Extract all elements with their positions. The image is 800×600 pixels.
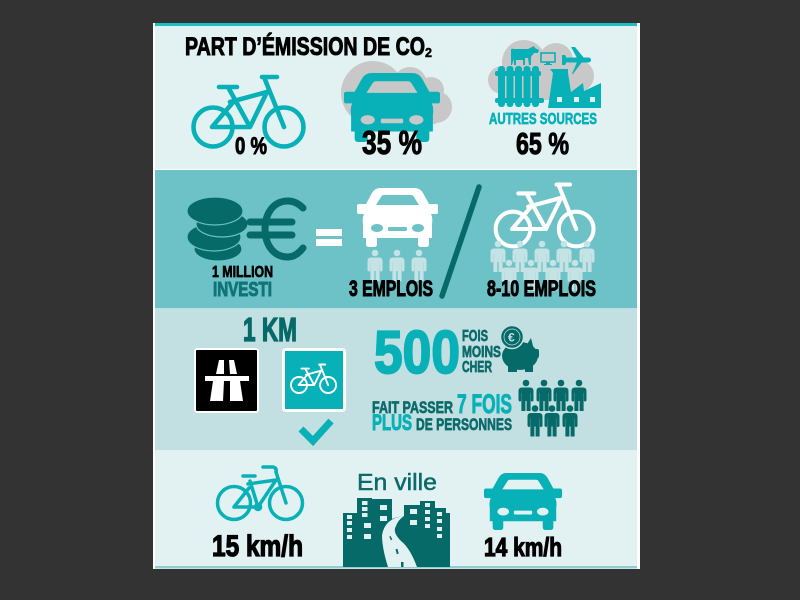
label: 8-10 emplois: 8-10 EMPLOIS — [487, 276, 596, 301]
label: 35 %: 35 % — [362, 124, 422, 161]
heading: 1 km: 1 KM — [243, 311, 297, 348]
stat: 500 times cheaper: 500 — [374, 319, 460, 386]
infographic card — [153, 23, 640, 569]
icon: cow — [511, 46, 539, 65]
stat: seven times more people: PLUS — [372, 410, 412, 435]
icon: piggy bank — [500, 326, 539, 372]
icon: cloud behind car — [341, 61, 452, 125]
icon: airplane — [562, 47, 591, 74]
label: 3 emplois: 3 EMPLOIS — [349, 276, 433, 301]
stat: seven times more people: DE PERSONNES — [416, 415, 512, 434]
icon: factory — [548, 69, 601, 108]
stat: seven times more people — [372, 389, 512, 435]
label: autres sources: AUTRES SOURCES — [489, 111, 597, 128]
stat: seven times more people: FAIT PASSER — [372, 398, 453, 417]
icon: workers group — [490, 241, 594, 291]
title: 2 — [425, 45, 432, 60]
icon: city bicycle — [218, 467, 302, 520]
panel: jobs per million invested — [155, 170, 637, 308]
stat: 500 times cheaper: FOIS — [462, 328, 488, 345]
icon: cycle path sign — [284, 350, 344, 410]
icon: piggy bank: € — [508, 330, 515, 344]
icon: cloud behind other sources — [488, 40, 594, 100]
label: 65 %: 65 % — [516, 126, 569, 161]
icon: euro sign — [250, 201, 303, 257]
stat: 500 times cheaper: MOINS — [462, 344, 501, 361]
label: investi: INVESTI — [213, 279, 272, 301]
icon: coin stack — [187, 197, 248, 261]
icon: equals sign — [316, 229, 342, 246]
panel: one km comparison — [155, 309, 637, 450]
title: PART D’ÉMISSION DE CO — [185, 32, 425, 61]
divider slash — [442, 187, 479, 296]
icon: car white — [357, 188, 438, 247]
icon: bicycle white — [496, 184, 594, 246]
label: 1 million: 1 MILLION — [212, 264, 273, 281]
icon: motorway sign — [195, 349, 258, 412]
label: 0 %: 0 % — [235, 133, 267, 160]
icon: car — [484, 473, 562, 530]
icon: monitor — [541, 53, 555, 65]
panel: city speed — [155, 451, 637, 568]
icon: bicycle 0 % — [194, 77, 304, 146]
label: 14 km/h: 14 km/h — [484, 532, 562, 562]
icon: car — [344, 73, 440, 142]
label: en ville: En ville — [357, 469, 437, 495]
stat: 500 times cheaper: CHER — [462, 359, 492, 376]
label: 15 km/h: 15 km/h — [212, 530, 303, 563]
icon: radiator — [495, 66, 544, 107]
icon: three workers — [368, 250, 426, 281]
icon: people group — [518, 380, 586, 436]
panel: CO2 emissions — [155, 23, 637, 169]
stat: seven times more people: 7 FOIS — [457, 389, 512, 419]
icon: city with road — [343, 498, 450, 567]
icon: check mark — [301, 421, 331, 441]
